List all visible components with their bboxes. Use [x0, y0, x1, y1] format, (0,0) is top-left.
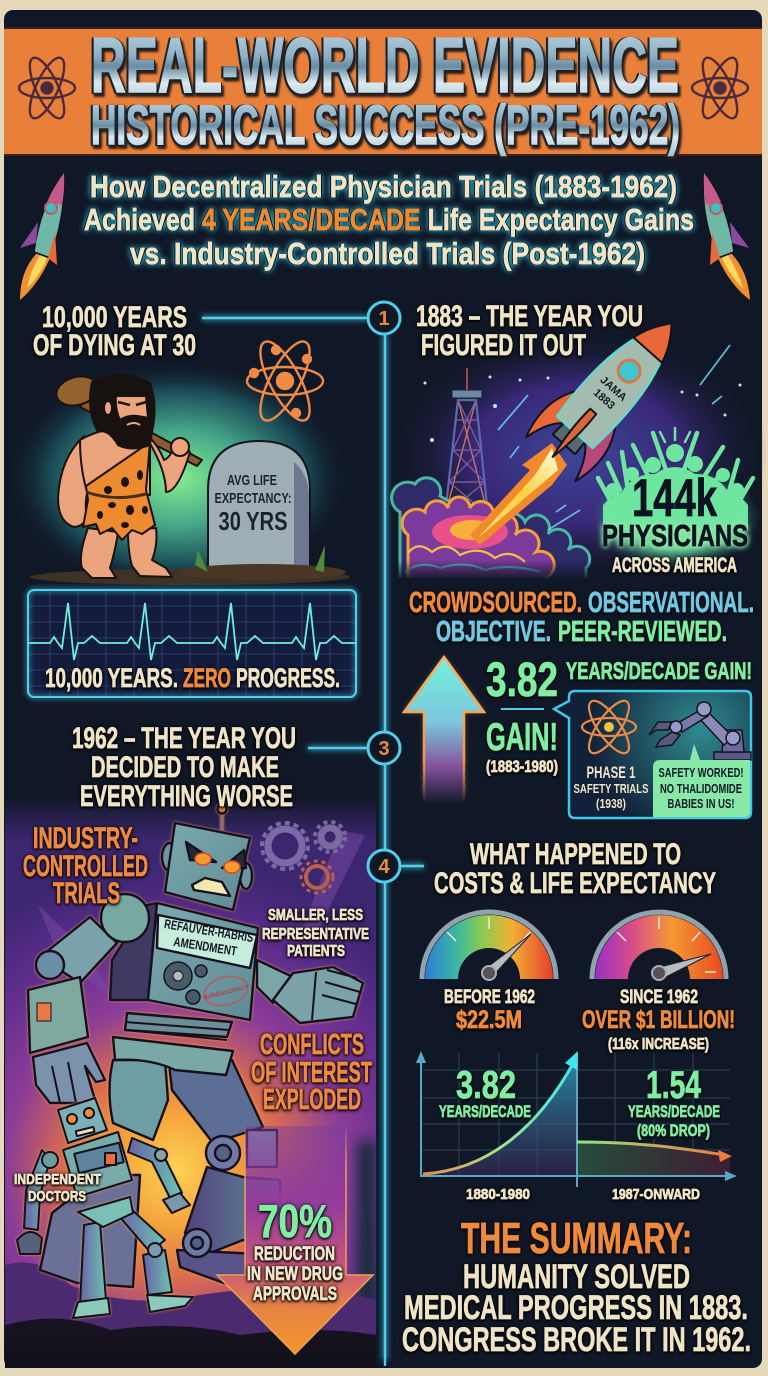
gauge: since 1962: SINCE 1962	[620, 987, 698, 1008]
axis labels	[466, 1186, 700, 1203]
step marker 3	[368, 732, 400, 764]
icon: left rocket	[20, 173, 64, 300]
ground	[30, 569, 350, 585]
callout: smaller patients: REPRESENTATIVE	[262, 926, 369, 943]
icon: orange atom	[247, 335, 323, 427]
caption: zero progress: 10,000 YEARS.	[45, 663, 178, 693]
step marker 3: 3	[378, 738, 390, 760]
stamp label: BUREAUCRACY	[203, 984, 250, 1002]
ECG line	[29, 603, 355, 660]
icon: robot arm	[649, 702, 751, 760]
icon: tombstone: 30 YRS	[218, 506, 288, 536]
timeline spine	[202, 302, 424, 1366]
heading: 10,000 years: OF DYING AT 30	[33, 329, 196, 362]
icon: left atom	[19, 53, 75, 123]
pelvis	[78, 1197, 133, 1227]
arms	[24, 1150, 50, 1230]
heading: 1883	[416, 300, 643, 362]
callout: safety worked: NO THALIDOMIDE	[660, 782, 742, 796]
tagline: crowdsourced	[409, 587, 754, 648]
panel 2: 1883 rocket scene	[388, 298, 768, 583]
arrow: 70% reduction: APPROVALS	[253, 1284, 337, 1305]
arrow: 70% reduction	[217, 1126, 373, 1354]
callout: safety worked	[653, 744, 750, 817]
heading: 1883: FIGURED IT OUT	[421, 329, 586, 362]
illustration: rocket	[522, 298, 700, 484]
title	[91, 21, 680, 156]
stamp label	[200, 972, 252, 1010]
line: post-1962 decline	[577, 1142, 725, 1155]
callout: conflicts of interest: EXPLODED	[263, 1084, 361, 1116]
gauge: before 1962: $22.5M	[456, 1006, 522, 1034]
arrow: 70% reduction: 70%	[258, 1195, 332, 1247]
axis labels: 1880-1980	[466, 1186, 530, 1203]
subtitle: vs. Industry-Controlled Trials (Post-1962)	[130, 236, 645, 271]
stars	[424, 364, 742, 442]
gauge: before 1962: BEFORE 1962	[444, 987, 535, 1008]
heading: 10,000 years: 10,000 YEARS	[42, 301, 187, 334]
stat: 1.54 years per decade	[628, 1064, 720, 1140]
line: pre-1962 growth	[423, 1060, 575, 1174]
label: independent doctors	[14, 1171, 101, 1205]
left hand	[33, 1043, 105, 1103]
panel: phase 1 safety trials	[554, 691, 751, 818]
right shin	[185, 1167, 280, 1257]
callout: industry-controlled trials: INDUSTRY-	[33, 822, 138, 855]
heading: 1962: DECIDED TO MAKE	[91, 751, 279, 784]
caption: zero progress: PROGRESS.	[236, 663, 340, 693]
illustration: rocket: 1883	[591, 387, 617, 412]
stat: 1.54 years per decade: YEARS/DECADE	[628, 1102, 720, 1121]
summary	[402, 1214, 751, 1359]
stat: 3.82 gain	[486, 654, 752, 776]
icon: tombstone: EXPECTANCY:	[214, 490, 292, 507]
stat: 3.82 gain: (1883-1980)	[486, 757, 558, 776]
step marker 1: 1	[378, 308, 390, 330]
text: phase 1	[574, 763, 649, 811]
heading: costs and life expectancy	[434, 838, 716, 900]
right thigh	[168, 1055, 263, 1143]
subtitle: Achieved 4 YEARS/DECADE Life Expectancy Gains	[84, 202, 694, 237]
callout: industry-controlled trials: CONTROLLED	[23, 850, 148, 883]
body	[63, 1132, 132, 1197]
tagline: crowdsourced: CROWDSOURCED.	[409, 587, 582, 619]
heading: 1962: EVERYTHING WORSE	[80, 780, 293, 813]
caption: zero progress	[45, 663, 340, 693]
caption: zero progress: ZERO	[183, 663, 231, 693]
text: phase 1: SAFETY TRIALS	[574, 781, 649, 796]
step marker 4	[368, 850, 400, 882]
gauge: since 1962	[582, 912, 735, 1053]
heading: 1883: 1883 – THE YEAR YOU	[416, 300, 643, 333]
callout: smaller patients: PATIENTS	[287, 943, 345, 960]
illustration: launch clouds	[392, 478, 591, 580]
left foot	[40, 1175, 140, 1287]
stat: 144k physicians: 144k	[632, 469, 717, 528]
gauge: before 1962	[422, 912, 556, 1034]
text: phase 1: (1938)	[596, 796, 626, 811]
text: phase 1: PHASE 1	[586, 763, 636, 782]
callout: conflicts of interest: OF INTEREST	[251, 1057, 372, 1089]
callout: smaller patients	[262, 907, 369, 960]
illustration: small robot	[17, 1098, 193, 1318]
callout: industry-controlled trials: TRIALS	[53, 877, 120, 910]
step marker 4: 4	[378, 856, 390, 878]
header banner	[4, 21, 762, 156]
step marker 1	[368, 302, 400, 334]
gauge: since 1962: (116x INCREASE)	[608, 1036, 709, 1053]
stat: 3.82 years per decade	[439, 1064, 531, 1121]
callout: conflicts of interest	[251, 1029, 372, 1116]
hips and waist	[113, 1037, 233, 1075]
illustration: cheering crowd	[592, 428, 760, 570]
robot chest label	[161, 916, 255, 961]
illustration: rocket: JAMA	[598, 374, 629, 404]
illustration: giant robot	[28, 804, 363, 1290]
tagline: crowdsourced: OBJECTIVE.	[436, 616, 551, 648]
axis labels: 1987-ONWARD	[612, 1186, 700, 1203]
torso	[110, 903, 157, 1000]
stat: 3.82 years per decade: 3.82	[456, 1064, 516, 1107]
icon: gears	[262, 822, 345, 893]
legs	[80, 1222, 106, 1305]
arrow: 70% reduction: REDUCTION	[254, 1244, 335, 1265]
head	[58, 1098, 107, 1143]
callout: industry-controlled trials	[23, 822, 148, 910]
icon: tombstone: AVG LIFE	[227, 472, 277, 489]
callout: conflicts of interest: CONFLICTS	[260, 1029, 364, 1061]
illustration: caveman	[53, 372, 202, 578]
label: independent doctors: INDEPENDENT	[14, 1171, 101, 1188]
stat: 3.82 gain: 3.82	[486, 654, 558, 707]
icon: right atom	[692, 53, 748, 123]
area: flat curve	[577, 1142, 730, 1176]
panel 3: robot scene	[5, 722, 376, 1368]
head	[220, 811, 224, 830]
illustration: oil tower	[445, 368, 488, 515]
callout: smaller patients: SMALLER, LESS	[268, 907, 363, 924]
panel 1: caveman scene	[6, 301, 350, 596]
callout: safety worked: BABIES IN US!	[668, 797, 734, 811]
stat: 1.54 years per decade: 1.54	[646, 1064, 701, 1107]
stat: 144k physicians	[602, 469, 748, 577]
heading: 10,000 years	[33, 301, 196, 362]
heading: 1962	[72, 722, 296, 813]
subtitle	[84, 169, 694, 271]
ECG panel	[28, 590, 356, 697]
arrow: 70% reduction: IN NEW DRUG	[247, 1264, 343, 1285]
heading: 1962: 1962 – THE YEAR YOU	[72, 722, 296, 755]
stat: 3.82 years per decade: YEARS/DECADE	[439, 1102, 531, 1121]
icon: tombstone	[178, 441, 346, 580]
arrow: gain	[404, 657, 484, 803]
stat: 1.54 years per decade: (80% DROP)	[637, 1121, 710, 1140]
streaks	[498, 345, 730, 530]
icon: atom	[582, 695, 636, 759]
robot chest label: REFAUVER-HABRIS	[163, 916, 255, 945]
label: independent doctors: DOCTORS	[28, 1188, 86, 1205]
ground	[5, 1262, 376, 1366]
right arm and fist	[257, 960, 293, 1003]
left thigh	[110, 1060, 168, 1140]
robot chest label: AMENDMENT	[173, 934, 238, 959]
icon: right rocket	[703, 173, 750, 300]
stat: 3.82 gain: GAIN!	[486, 716, 558, 759]
subtitle: How Decentralized Physician Trials (1883-1962)	[90, 169, 677, 204]
illustration: rocket flame	[470, 443, 567, 545]
left arm	[40, 917, 117, 983]
chart: life expectancy gain	[416, 1051, 737, 1203]
area: rising curve	[423, 1056, 577, 1176]
